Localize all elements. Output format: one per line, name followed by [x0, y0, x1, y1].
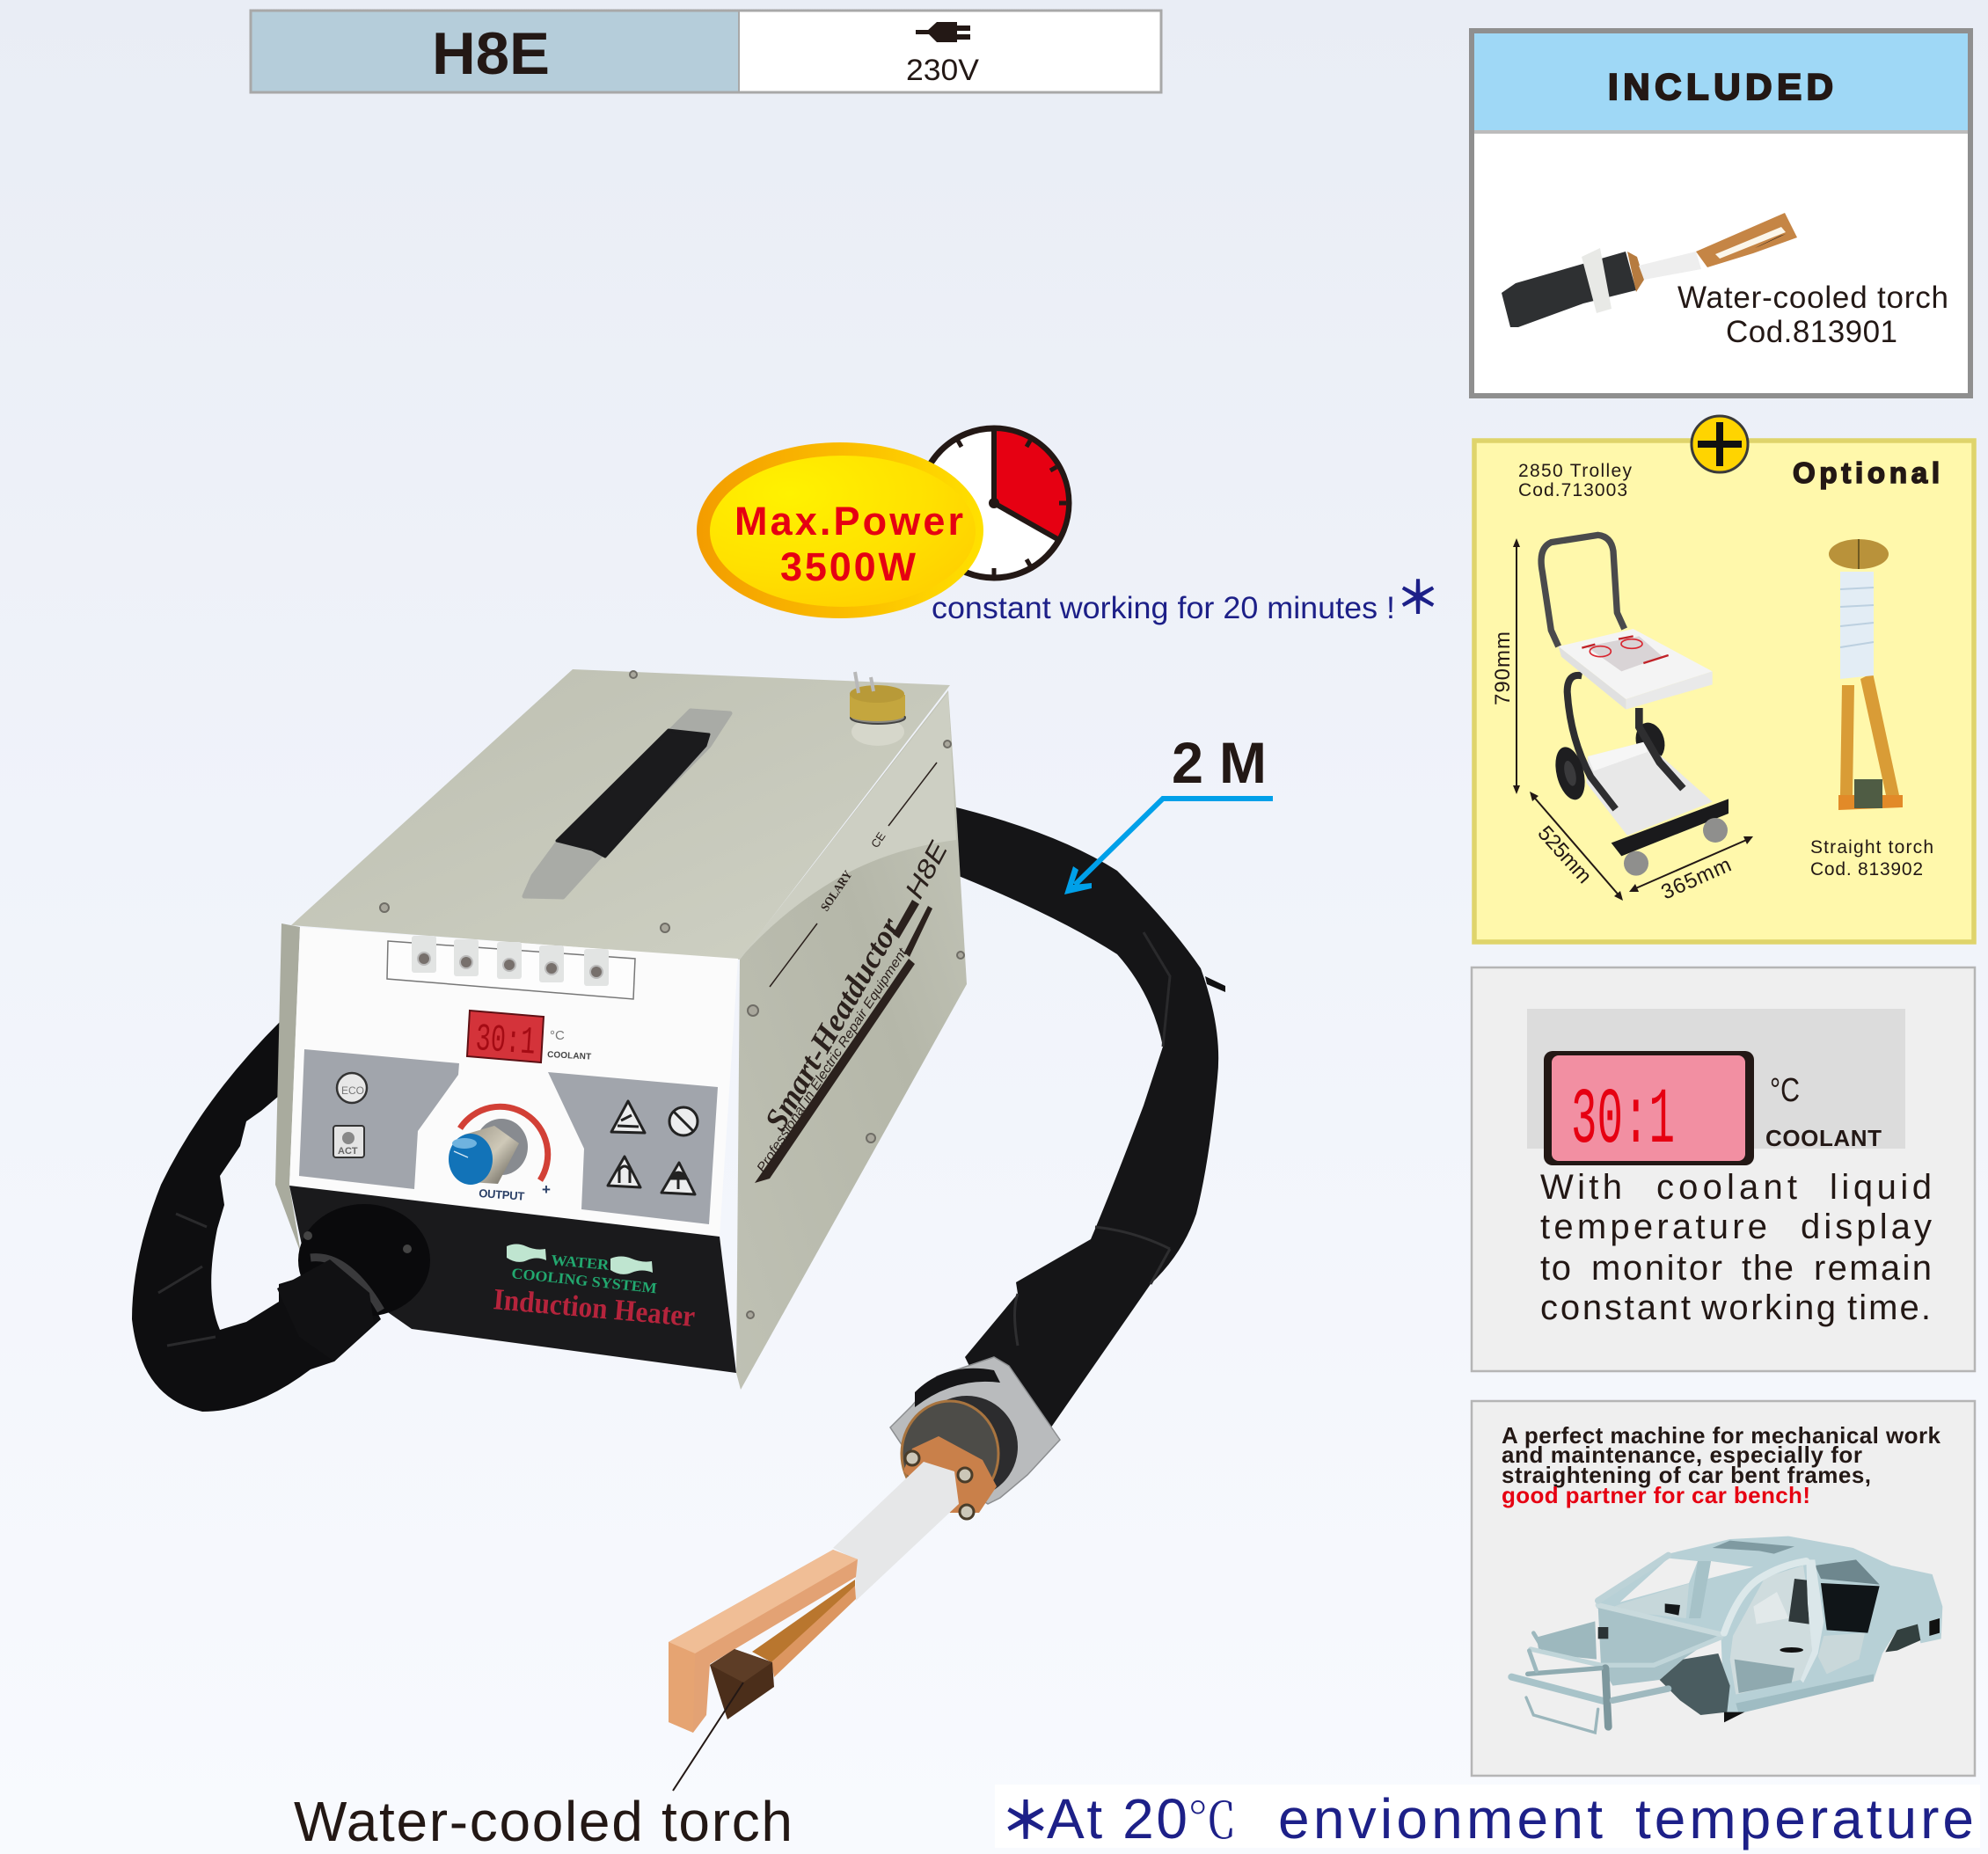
- footnote: environment temperature: temperature: [1635, 1787, 1974, 1850]
- led strip: [387, 936, 635, 999]
- filler cap: [850, 672, 905, 746]
- asterisk note mark: ＊: [1396, 563, 1440, 626]
- straight torch caption: Cod. 813902: [1810, 859, 1923, 880]
- footnote: environment temperature: ＊: [1001, 1782, 1050, 1853]
- unit label: COOLANT: [1765, 1125, 1882, 1151]
- icon: plus: [1692, 416, 1748, 472]
- black base panel: [289, 1186, 736, 1373]
- heading: INCLUDED: [1608, 66, 1833, 107]
- base logo: COOLING SYSTEM: [511, 1265, 658, 1296]
- description text: remain: [1814, 1249, 1932, 1288]
- left gray control panel: [299, 1049, 459, 1189]
- screws: [380, 671, 964, 1318]
- handle: [524, 711, 730, 897]
- straight torch caption: [1810, 837, 1933, 880]
- flange: [277, 1204, 430, 1361]
- output knob: OUTPUT: [479, 1186, 525, 1203]
- description text: [1540, 1168, 1932, 1327]
- caption: constant working time: constant working for 20 minutes !: [932, 591, 1395, 625]
- contact block: [710, 1649, 774, 1719]
- straight torch caption: Straight torch: [1810, 837, 1933, 858]
- panel: coolant display: [1472, 967, 1975, 1371]
- machine body: [275, 669, 967, 1390]
- description text: [1502, 1422, 1941, 1508]
- temperature display: [467, 1011, 591, 1066]
- description text: the: [1742, 1249, 1794, 1288]
- optional heading: Optional: [1793, 456, 1940, 489]
- lcd display: 30:1: [1571, 1077, 1675, 1166]
- copper plate: [903, 1436, 997, 1513]
- model name: H8E: [432, 20, 550, 87]
- badge: max power: Max.Power: [735, 499, 963, 544]
- panel: included: Cod.813901: [1726, 315, 1897, 349]
- straight torch image: [1829, 539, 1903, 810]
- description text: to: [1540, 1249, 1571, 1288]
- leader line: [673, 1682, 743, 1791]
- clock icon: 20 minutes: [919, 428, 1069, 578]
- description text: liquid: [1830, 1168, 1932, 1207]
- side face: [736, 690, 967, 1390]
- side graphics: Smart-Heatductor: [757, 911, 908, 1136]
- description text: A perfect machine for mechanical work: [1502, 1422, 1941, 1449]
- torch head: [669, 1357, 1060, 1733]
- base logo: Induction Heater: [492, 1283, 697, 1333]
- white tape: [833, 1462, 959, 1601]
- lcd display: [1544, 1051, 1754, 1166]
- description text: working: [1700, 1288, 1836, 1327]
- left strip: [275, 923, 301, 1253]
- base logo: [492, 1244, 697, 1333]
- footnote: environment temperature: ℃: [1188, 1783, 1237, 1853]
- description text: time.: [1847, 1288, 1931, 1327]
- water-cooled torch image: [1502, 213, 1797, 327]
- left gray control panel: ECO: [341, 1084, 364, 1097]
- hose: right cable: [946, 805, 1225, 1434]
- icon: power plug: [916, 22, 970, 42]
- front white panel: [289, 927, 738, 1237]
- description text: good partner for car bench!: [1502, 1482, 1810, 1508]
- description text: With: [1540, 1168, 1622, 1207]
- dimension arrows: [1513, 538, 1753, 901]
- dimension labels: [1491, 631, 1735, 904]
- description text: temperature: [1540, 1208, 1767, 1246]
- header: model and voltage: [251, 11, 1161, 92]
- base logo: WATER: [551, 1252, 610, 1274]
- bolts: [905, 1451, 974, 1519]
- side graphics: [754, 763, 954, 1183]
- side graphics: Professional in Electric Repair Equipment: [754, 945, 910, 1175]
- side graphics: CE: [868, 829, 888, 850]
- description text: display: [1801, 1208, 1932, 1246]
- temperature display: COOLANT: [547, 1050, 591, 1062]
- footnote: environment temperature: [995, 1782, 1980, 1853]
- panel: included: [1472, 31, 1970, 396]
- car frame image: [1511, 1536, 1942, 1733]
- output knob: +: [542, 1181, 551, 1198]
- description text: constant: [1540, 1288, 1691, 1327]
- right gray warning panel: [548, 1072, 718, 1224]
- temperature display: °C: [550, 1028, 565, 1043]
- silver clamp: [890, 1357, 1060, 1504]
- badge: max power: [697, 442, 983, 618]
- voltage: 230V: [906, 54, 979, 87]
- description text: straightening of car bent frames,: [1502, 1462, 1871, 1488]
- top face: [291, 669, 950, 960]
- temperature display: 30:1: [474, 1018, 537, 1066]
- trolley image: [1541, 535, 1729, 876]
- caption: constant working time: [932, 563, 1440, 626]
- trolley caption: 2850 Trolley: [1518, 461, 1633, 481]
- footnote: environment temperature: envionment: [1278, 1787, 1603, 1850]
- description text: monitor: [1591, 1249, 1722, 1288]
- footnote: environment temperature: At 20: [1047, 1787, 1188, 1850]
- panel: optional: [1474, 416, 1974, 942]
- description text: coolant: [1656, 1168, 1797, 1207]
- panel: car body: [1472, 1401, 1975, 1776]
- trolley caption: [1518, 461, 1633, 500]
- trolley caption: Cod.713003: [1518, 480, 1627, 500]
- dimension labels: 790mm: [1491, 631, 1515, 705]
- arrow: 2 M cable length: [1064, 730, 1273, 894]
- arrow: 2 M cable length: 2 M: [1172, 730, 1267, 795]
- unit label: [1765, 1072, 1882, 1151]
- dimension labels: 365mm: [1657, 853, 1735, 904]
- description text: and maintenance, especially for: [1502, 1442, 1862, 1468]
- left gray control panel: ACT: [338, 1146, 358, 1157]
- dimension labels: 525mm: [1533, 821, 1597, 888]
- side graphics: SOLARY: [819, 869, 855, 914]
- label: water-cooled torch: Water-cooled torch: [294, 1790, 793, 1853]
- torch caption: Water-cooled torch: [1677, 281, 1948, 315]
- hose: left cable: [132, 1022, 381, 1412]
- badge: max power: 3500W: [780, 544, 917, 589]
- unit label: °C: [1770, 1072, 1800, 1109]
- side graphics: H8E: [900, 836, 954, 903]
- copper fork: [669, 1550, 858, 1733]
- output knob: [449, 1106, 551, 1203]
